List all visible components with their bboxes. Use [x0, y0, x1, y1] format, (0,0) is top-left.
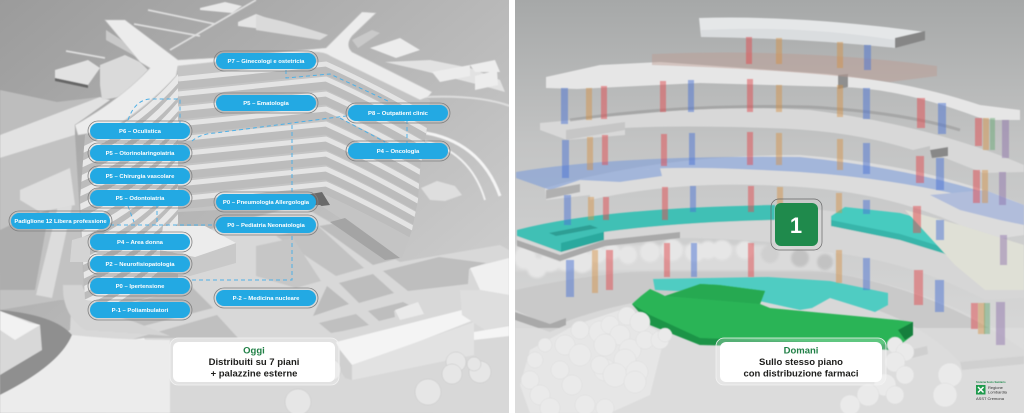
ground: streets and plots — [0, 90, 509, 413]
logo: Regione Lombardia ASST Cremona: Lombardia — [988, 390, 1008, 394]
lower wing block — [160, 243, 236, 276]
label: P0 Pediatria Neonatologia: P0 – Pediatria Neonatologia — [227, 223, 306, 229]
callout: Oggi: Oggi — [243, 346, 265, 356]
label: P4 Oncologia — [346, 141, 450, 161]
coloured risers: orange — [586, 38, 989, 334]
label: P4 Oncologia: P4 – Oncologia — [377, 149, 420, 155]
label: P5 Ematologia — [214, 93, 318, 113]
ground level teal department — [653, 277, 888, 312]
label: P6 Oculistica: P6 – Oculistica — [119, 129, 162, 135]
tree line behind ground floor — [514, 239, 835, 278]
building: stacked floors — [70, 52, 430, 302]
label: Padiglione 12 Libera professione — [9, 211, 112, 231]
callout: Domani: Sullo stesso piano — [759, 357, 843, 368]
callout: Domani: con distribuzione farmaci — [743, 368, 859, 380]
label: P2 Neurofisiopatologia — [88, 254, 192, 274]
label: P6 Oculistica — [88, 121, 192, 141]
level 7 top slab — [699, 18, 925, 48]
logo: Regione Lombardia ASST Cremona: Regione — [988, 385, 1004, 390]
ground level green department — [632, 284, 913, 350]
label: P5 Chirurgia vascolare — [88, 166, 192, 186]
label: P0 Ipertensione — [88, 276, 192, 296]
label: P-1 Poliambulatori: P-1 – Poliambulatori — [112, 308, 169, 314]
level 5 slab — [546, 62, 1020, 120]
building roof: T-shaped top floor — [75, 12, 432, 135]
label: P-1 Poliambulatori — [88, 300, 192, 320]
label: P-2 Medicina nucleare: P-2 – Medicina nucleare — [233, 296, 300, 302]
logo: Regione Lombardia ASST Cremona: ASST Cremona — [976, 396, 1005, 401]
level 4 slab — [540, 107, 1024, 173]
label: P5 Ematologia: P5 – Ematologia — [243, 101, 289, 107]
logo: Regione Lombardia ASST Cremona: Sistema Socio Sanitario — [976, 380, 1006, 384]
label: P5 Chirurgia vascolare: P5 – Chirurgia vascolare — [106, 174, 175, 180]
logo: Regione Lombardia ASST Cremona — [976, 380, 1008, 401]
label: P8 Outpatient clinic — [346, 103, 450, 123]
panel: Oggi, current hospital building model — [0, 0, 510, 413]
dashed connector lines — [110, 70, 407, 280]
label: P7 Ginecologi e ostetricia: P7 – Ginecologi e ostetricia — [228, 59, 305, 65]
label: P0 Pneumologia Allergologia — [214, 192, 318, 212]
label: P5 Odontoiatria — [88, 188, 192, 208]
badge: number 1: 1 — [790, 213, 802, 238]
callout: Oggi: Distribuiti su 7 piani — [209, 357, 299, 368]
background streets and buildings — [55, 0, 510, 201]
panel: Domani, future hospital floors exploded model — [514, 0, 1024, 413]
left road and white foreground — [0, 310, 72, 395]
label: P4 Area donna: P4 – Area donna — [117, 240, 164, 246]
label: Padiglione 12 Libera professione: Padiglione 12 Libera professione — [14, 219, 107, 225]
badge: number 1 — [771, 199, 822, 250]
label: P0 Pediatria Neonatologia — [214, 215, 318, 235]
callout: Oggi: + palazzine esterne — [211, 368, 297, 380]
level 3 slab with blue translucent department — [516, 155, 1024, 290]
coloured risers: red — [601, 37, 982, 329]
label: P5 Otorinolaringoiatria: P5 – Otorinolaringoiatria — [106, 151, 175, 157]
label: P4 Area donna — [88, 232, 192, 252]
label: P7 Ginecologi e ostetricia — [214, 51, 318, 71]
trees foreground cluster — [520, 307, 962, 413]
level 2 slab with teal department — [516, 204, 946, 262]
label: P2 Neurofisiopatologia: P2 – Neurofisiopatologia — [105, 262, 175, 268]
label: P8 Outpatient clinic: P8 – Outpatient clinic — [368, 111, 429, 117]
label: P-2 Medicina nucleare — [214, 288, 318, 308]
coloured risers: green and purple — [984, 118, 1009, 345]
label: P5 Otorinolaringoiatria — [88, 143, 192, 163]
label: P5 Odontoiatria: P5 – Odontoiatria — [116, 196, 165, 202]
callout: Domani — [716, 338, 886, 385]
callout: Oggi — [170, 338, 339, 385]
ground level slab — [515, 274, 1024, 370]
trees — [285, 352, 491, 413]
coloured risers: blue — [561, 45, 946, 312]
level 6 translucent slab — [652, 52, 937, 82]
label: P0 Ipertensione: P0 – Ipertensione — [116, 284, 165, 290]
callout: Domani: Domani — [784, 346, 818, 356]
label: P0 Pneumologia Allergologia: P0 – Pneumologia Allergologia — [223, 200, 310, 206]
foreground buildings — [336, 258, 509, 380]
